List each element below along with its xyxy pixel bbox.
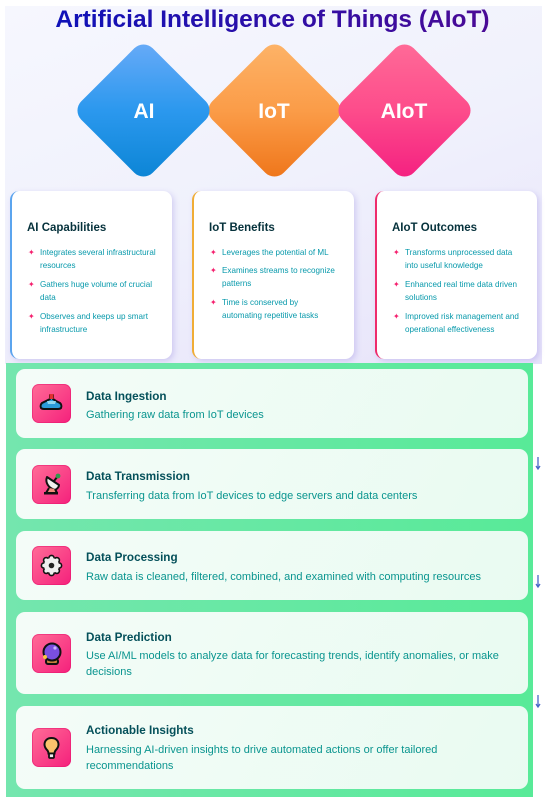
step: Data Ingestion: Gathering raw data from IoT devices [86,409,264,421]
step: Data Processing: Raw data is cleaned, filtered, combined, and examined with computing resources [86,571,481,583]
panel: IoT Benefits: Leverages the potential of ML [222,248,329,257]
label: AI: AI [134,100,154,123]
step: Data Prediction: decisions [86,666,132,678]
panel: AIoT Outcomes: Improved risk management and [405,312,519,321]
panel: IoT Benefits [192,191,354,359]
icon: crystal ball [32,634,71,673]
arrow: processing [536,575,540,588]
step: Data Prediction: Data Prediction [86,631,172,644]
panel: AI Capabilities: infrastructure [40,325,87,334]
icon: satellite dish [32,465,71,504]
panel: AI Capabilities: Integrates several infrastructural [40,248,156,257]
step: Data Prediction: Use AI/ML models to analyze data for forecasting trends, identify anomalies, or make [86,650,499,662]
step: Data Prediction [16,612,528,694]
label: AIoT: AIoT [381,100,427,123]
icon: gear [32,546,71,585]
panel: IoT Benefits: ✦ [210,298,217,307]
diamond: AIoT [333,39,475,181]
panel: IoT Benefits: Examines streams to recognize [222,266,335,275]
panel: AI Capabilities [10,191,172,359]
panel: AI Capabilities: ✦ [28,312,35,321]
icon: light bulb [32,728,71,767]
panel: AI Capabilities: resources [40,261,76,270]
panel: AI Capabilities: Observes and keeps up smart [40,312,148,321]
panel: AI Capabilities: data [40,293,56,302]
panel: process steps background [6,363,533,797]
panel: IoT Benefits: automating repetitive tasks [222,311,318,320]
panel: IoT Benefits: ✦ [210,266,217,275]
panel: AIoT Outcomes: AIoT Outcomes [392,222,477,234]
top panel [5,6,542,364]
panel: AI Capabilities: ✦ [28,248,35,257]
panel: AIoT Outcomes: Enhanced real time data driven [405,280,517,289]
panel: IoT Benefits: ✦ [210,248,217,257]
icon: funnel device [32,384,71,423]
diamond: IoT [203,39,345,181]
arrow: prediction [536,695,540,708]
panel: AI Capabilities: AI Capabilities [27,222,106,234]
panel: AIoT Outcomes [375,191,537,359]
step: Data Ingestion [16,369,528,438]
panel: AI Capabilities: Gathers huge volume of crucial [40,280,152,289]
step: Data Ingestion: Data Ingestion [86,390,167,403]
arrow: transmission [536,457,540,470]
step: Data Transmission: Transferring data from IoT devices to edge servers and data centers [86,490,417,502]
panel: AIoT Outcomes: ✦ [393,248,400,257]
panel: IoT Benefits: patterns [222,279,251,288]
step: Data Transmission: Data Transmission [86,470,190,483]
step: Data Processing [16,531,528,600]
diamond: AI [72,39,215,181]
step: Data Transmission [16,449,528,519]
step: Actionable Insights: Actionable Insights [86,724,194,737]
step: Data Processing: Data Processing [86,551,178,564]
panel: AIoT Outcomes: Transforms unprocessed data [405,248,512,257]
step: Actionable Insights: Harnessing AI-driven insights to drive automated actions or offer tailored [86,744,437,756]
step: Actionable Insights: recommendations [86,760,173,772]
panel: AIoT Outcomes: solutions [405,293,437,302]
panel: AIoT Outcomes: into useful knowledge [405,261,483,270]
title: Artificial Intelligence of Things (AIoT) [55,6,490,33]
panel: IoT Benefits: IoT Benefits [209,222,275,234]
step: Actionable Insights [16,706,528,789]
label: IoT: IoT [258,100,290,123]
panel: AIoT Outcomes: ✦ [393,312,400,321]
panel: AIoT Outcomes: ✦ [393,280,400,289]
panel: IoT Benefits: Time is conserved by [222,298,298,307]
panel: AIoT Outcomes: operational effectiveness [405,325,494,334]
panel: AI Capabilities: ✦ [28,280,35,289]
